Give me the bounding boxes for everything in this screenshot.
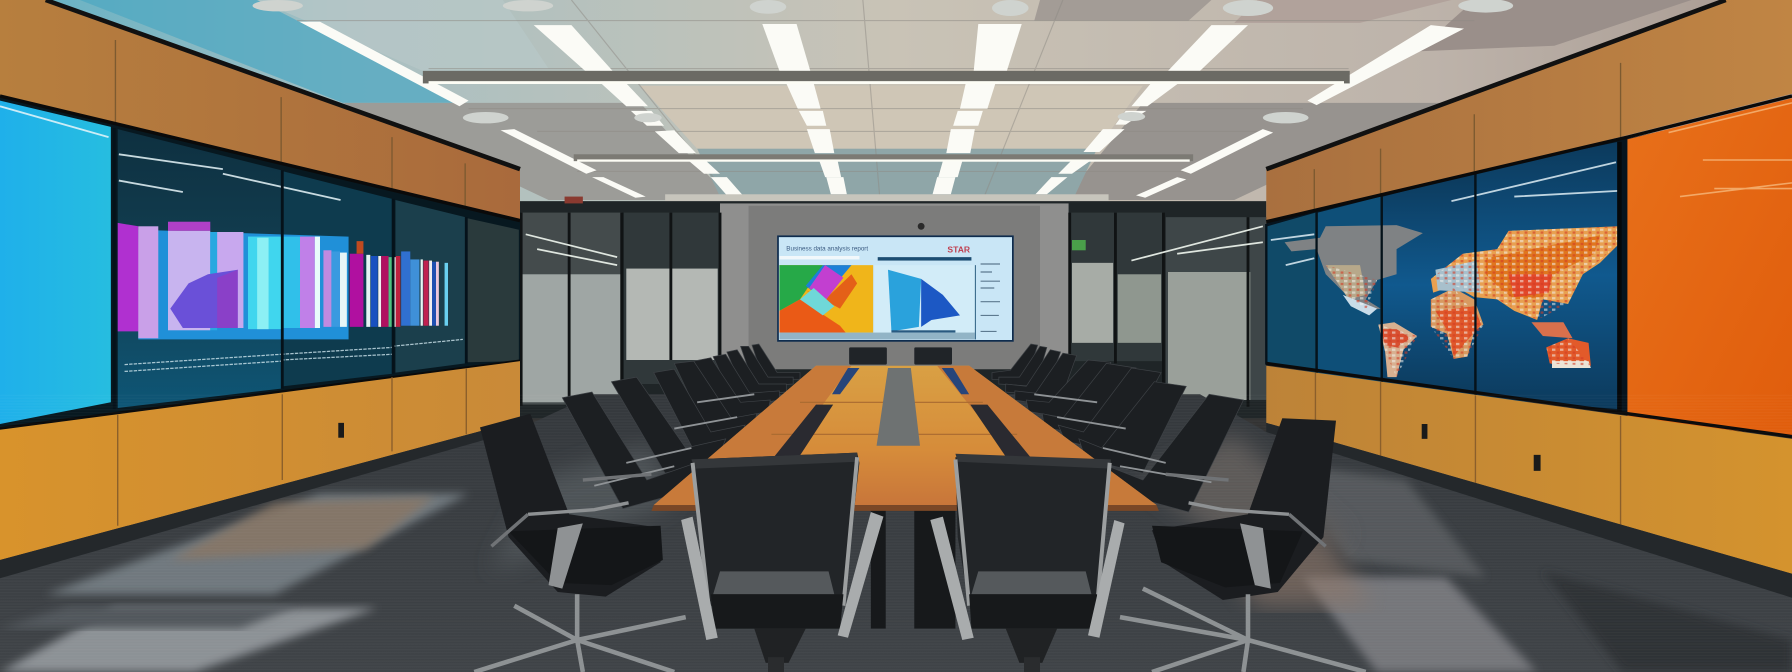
right wall upper wood (1266, 0, 1792, 226)
left wall lower wood (0, 361, 520, 578)
chairs: far rows (562, 344, 1243, 512)
right display wall (1266, 96, 1792, 437)
australia (1546, 338, 1591, 368)
ceiling (0, 0, 1792, 217)
left chart on main screen (779, 265, 873, 333)
ceiling grid lines (297, 0, 1474, 200)
recessed ceiling lights (253, 0, 1513, 123)
africa (1431, 288, 1483, 359)
table legs (871, 509, 955, 629)
cyan display panel (0, 101, 111, 424)
ceiling light strips (299, 22, 1464, 198)
front right side chair (1120, 418, 1366, 672)
world map on right display (1285, 225, 1618, 377)
back wall and glass rooms (520, 197, 1266, 418)
chair base (1120, 589, 1366, 672)
far head chairs (849, 347, 952, 365)
horizontal light beams (423, 71, 1350, 201)
right wall lower wood (1266, 366, 1792, 598)
bar chart on left display (118, 222, 448, 339)
chair arm highlights, far rows (594, 394, 1211, 486)
orange display panel (1627, 98, 1792, 437)
left display wall (0, 96, 520, 430)
map texture (1326, 226, 1618, 377)
left wall upper wood (0, 0, 520, 229)
heading on main screen: Business data analysis report (786, 245, 868, 252)
right chart on main screen (874, 265, 975, 333)
main back screen (777, 223, 1014, 342)
eurasia (1431, 226, 1618, 320)
logo on main screen: STAR (947, 245, 971, 255)
front left head chair (681, 453, 883, 672)
front right head chair (930, 454, 1125, 672)
conference table (651, 366, 1159, 511)
south america (1378, 322, 1417, 377)
southeast asia (1531, 322, 1573, 338)
front left side chair (474, 414, 686, 672)
north america (1285, 225, 1423, 311)
table center media bar (877, 368, 920, 446)
chair base (474, 594, 686, 672)
floor carpet (0, 394, 1792, 672)
caption lines on left display (125, 339, 463, 371)
